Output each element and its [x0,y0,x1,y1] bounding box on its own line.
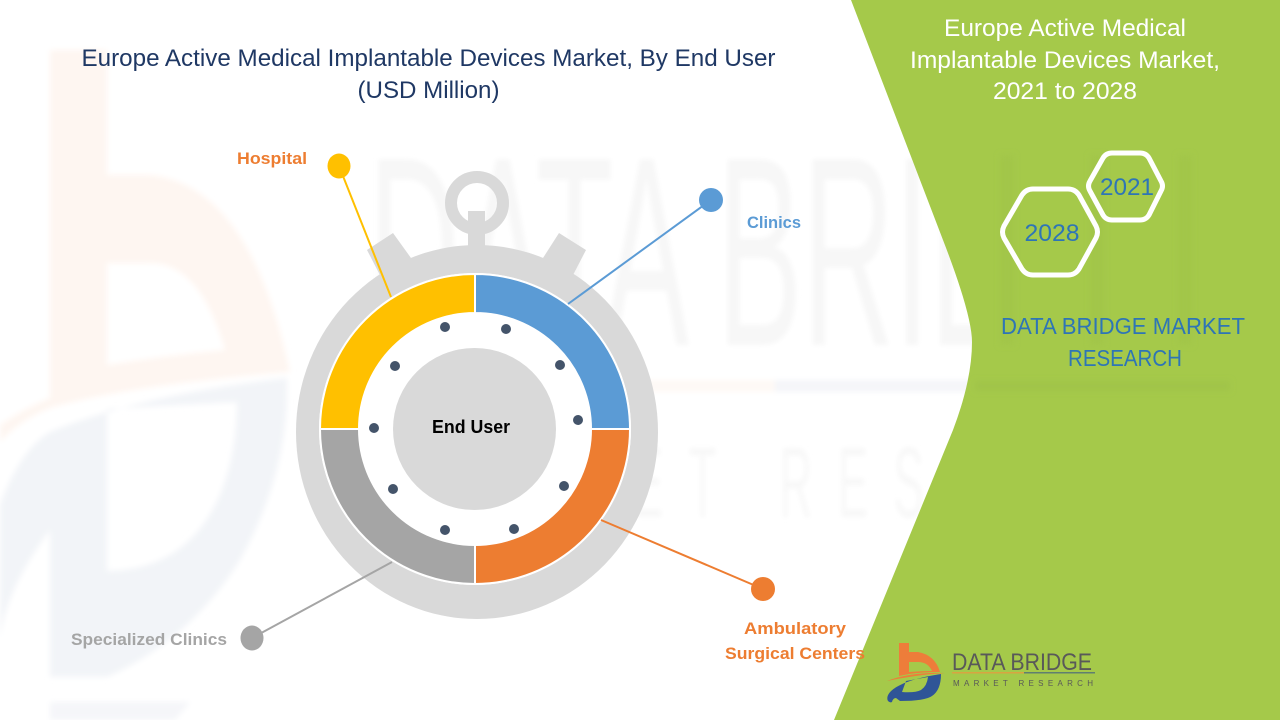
callout: ambulatory surgical centers [601,520,865,663]
hexagon: 2021: 2021 [1100,174,1154,201]
panel heading [910,15,1220,105]
stopwatch stem [468,211,485,256]
left lug [367,233,411,277]
logo icon blue swoosh [887,674,941,702]
hexagon: 2021 [1088,153,1162,220]
logo: data bridge [887,643,1095,702]
donut ring [320,274,630,584]
label: clinics: Clinics [747,213,801,232]
company name [1001,313,1245,371]
logo wordmark: DATA BRIDGE [952,649,1092,676]
watermark: logo [0,50,290,720]
company name: RESEARCH [1068,345,1182,371]
segment: hospital [320,274,475,429]
watermark: company name [368,102,1230,539]
stopwatch body [296,177,658,619]
label: ambulatory surgical centers [725,619,865,663]
callout: clinics [568,188,801,304]
logo icon orange b [899,643,940,676]
green side panel [834,0,1280,720]
hexagon: 2028 [1002,189,1098,275]
label: specialized clinics: Specialized Clinics [71,630,227,649]
company name: DATA BRIDGE MARKET [1001,313,1245,339]
panel heading: 2021 to 2028 [993,78,1137,105]
callout: hospital [237,149,391,297]
stopwatch case [296,245,658,619]
label: ambulatory surgical centers: Ambulatory [744,619,847,638]
panel heading: Europe Active Medical [944,15,1186,42]
stopwatch top ring [451,177,503,229]
title: (USD Million) [358,77,500,104]
right lug [543,233,586,277]
label: ambulatory surgical centers: Surgical Centers [725,644,865,663]
hexagon: 2028: 2028 [1024,220,1080,247]
dial dots [369,322,583,535]
title [82,45,776,104]
segment: specialized clinics [320,429,475,584]
segment: clinics [475,274,630,429]
title: Europe Active Medical Implantable Devices Market, By End User [82,45,776,72]
watermark: company name: MARKET RESEARCH [400,428,1210,539]
logo tagline: MARKET RESEARCH [953,679,1093,688]
label: hospital: Hospital [237,149,307,168]
ring hole [319,273,631,585]
callout: specialized clinics [71,562,392,650]
center label: End User [432,417,510,437]
panel watermark tint [975,155,1230,391]
segment: ambulatory surgical centers [475,429,630,584]
panel heading: Implantable Devices Market, [910,47,1220,74]
center hub [393,348,556,510]
